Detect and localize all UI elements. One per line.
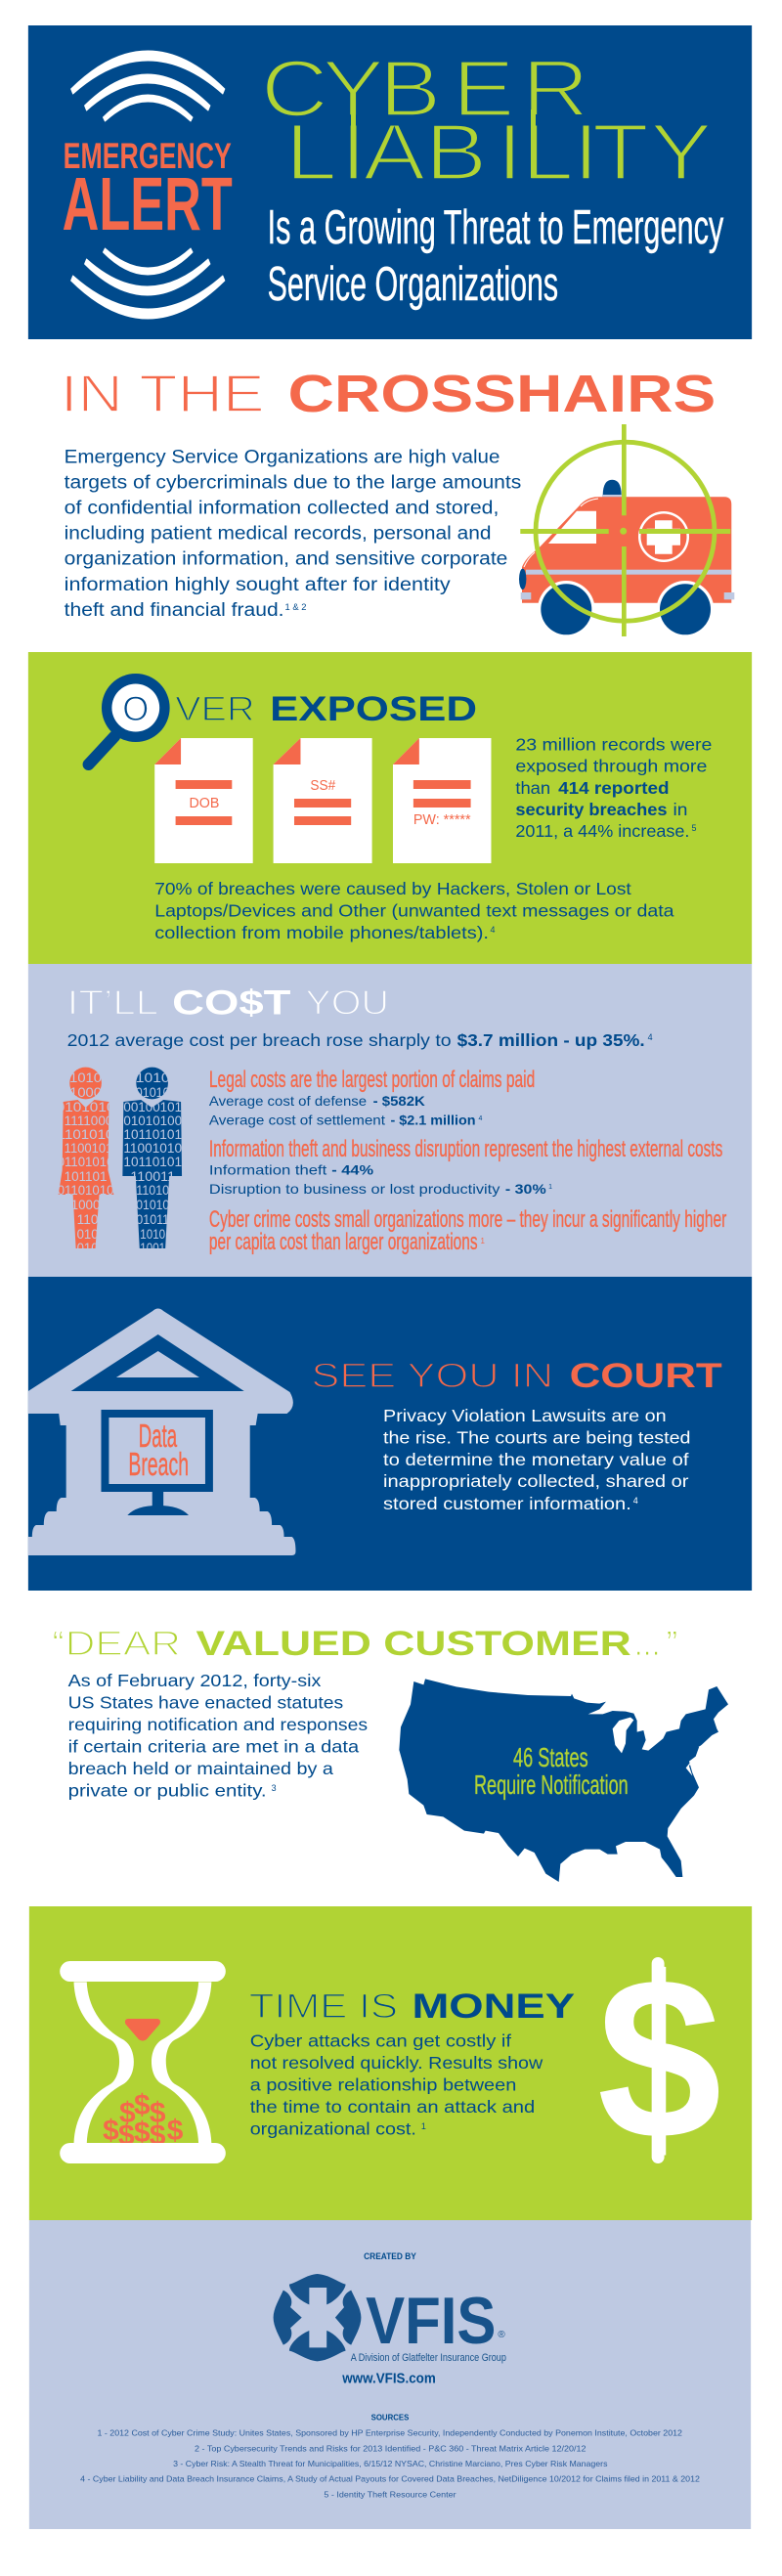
icon: woman figure made of binary: 1100101 (65, 1140, 113, 1156)
text block: 23 million records: 23 million records were (515, 735, 712, 755)
text block: cyber attacks (250, 2031, 543, 2139)
text block: state statutes: breach held or maintained by a (68, 1759, 333, 1778)
text block: information theft (209, 1136, 722, 1197)
text block: crosshairs intro: information highly sought after for identity (65, 574, 451, 595)
heading: time is money: MONEY (412, 1987, 575, 2026)
text block: cyber attacks: organizational cost. (250, 2119, 416, 2139)
panel: see you in court (28, 1277, 752, 1591)
icon: hourglass: $ (150, 2097, 166, 2129)
text block: legal costs: - $2.1 million (390, 1113, 476, 1128)
icon: woman figure made of binary: 0101010 (57, 1099, 115, 1114)
panel: over exposed (28, 652, 752, 964)
text block: 23 million records: in (673, 800, 687, 819)
text block: crosshairs intro: targets of cybercriminals due to the large amounts (65, 471, 522, 493)
text block: 23 million records: 2011, a 44% increase. (515, 821, 689, 841)
sources list: 3 - Cyber Risk: A Stealth Threat for Municipalities, 6/15/12 NYSAC, Christine Marciano, Pres Cyber Risk Managers (173, 2459, 607, 2468)
text block: crosshairs intro: organization information, and sensitive corporate (65, 548, 507, 570)
text block: information theft: 1 (548, 1184, 552, 1191)
emergency alert label (63, 136, 233, 246)
icon: courthouse (28, 1308, 295, 1555)
average cost per breach line: 4 (648, 1032, 653, 1042)
text block: 70 percent of breaches: collection from mobile phones/tablets). (154, 923, 489, 942)
text block: cyber attacks: not resolved quickly. Results show (250, 2053, 543, 2073)
text block: legal costs: Average cost of settlement (209, 1113, 385, 1128)
heading: over exposed: EXPOSED (270, 690, 477, 728)
text block: cyber attacks: the time to contain an attack and (250, 2097, 535, 2117)
text block: privacy lawsuits: stored customer information. (383, 1494, 631, 1513)
icon: man figure made of binary: 01010 (136, 1197, 169, 1212)
text block: privacy lawsuits: Privacy Violation Lawsuits are on (383, 1406, 667, 1425)
icon: woman figure made of binary: 010 (77, 1240, 99, 1255)
logo: VFIS: VFIS (366, 2285, 496, 2358)
text block: crosshairs intro: 1 & 2 (285, 602, 306, 613)
text block: 70 percent of breaches: 70% of breaches were caused by Hackers, Stolen or Lost (154, 879, 631, 898)
icon: woman figure made of binary: 1111000 (65, 1113, 113, 1128)
document: date of birth (154, 738, 253, 863)
average cost per breach line: $3.7 million - up 35%. (457, 1030, 645, 1050)
text block: 70 percent of breaches: Laptops/Devices and Other (unwanted text messages or data (154, 901, 674, 921)
document: social security number: SS# (310, 778, 335, 794)
text block: cyber attacks: a positive relationship between (250, 2075, 516, 2095)
icon: man figure made of binary: 1010 (140, 1226, 165, 1242)
icon: ambulance in crosshairs (519, 424, 734, 638)
panel: time is money (29, 1906, 752, 2220)
panel: dear valued customer (53, 1625, 728, 1882)
icon: woman figure made of binary: 101101 (65, 1168, 108, 1184)
panel: in the crosshairs (61, 365, 734, 638)
icon: man figure made of binary: 00100101 (123, 1099, 182, 1114)
text block: cyber crime costs: 1 (481, 1237, 486, 1245)
heading: dear valued customer: VALUED CUSTOMER (196, 1625, 631, 1663)
logo: VFIS: ® (498, 2330, 505, 2340)
title: cyber liability: LIABILITY (285, 107, 713, 196)
icon: hourglass: $ (119, 2097, 136, 2129)
text block: privacy lawsuits: the rise. The courts are being tested (383, 1428, 690, 1448)
website link: www.VFIS.com (341, 2372, 436, 2387)
icon: hourglass: $ (150, 2119, 166, 2152)
icon: hourglass: $ (103, 2115, 119, 2147)
icon: man figure made of binary: 01010 (136, 1084, 170, 1100)
panel: header (28, 25, 752, 339)
average cost per breach line (67, 1030, 653, 1050)
text block: state statutes: As of February 2012, forty-six (68, 1671, 322, 1690)
heading: over exposed: VER (175, 690, 255, 728)
icon: man figure made of binary: 11010 (136, 1182, 169, 1198)
icon: man figure made of binary: 1010 (136, 1070, 170, 1085)
text block: information theft: Information theft (209, 1163, 327, 1178)
text block: crosshairs intro: Emergency Service Organizations are high value (65, 446, 500, 467)
text block: privacy lawsuits: inappropriately collected, shared or (383, 1471, 689, 1491)
sources list: 4 - Cyber Liability and Data Breach Insurance Claims, A Study of Actual Payouts for Covered Data Breaches, NetDiligence 10/2012 for Claims filed in 2011 & 2012 (80, 2474, 700, 2484)
text block: state statutes: if certain criteria are met in a data (68, 1737, 359, 1757)
sources list: 1 - 2012 Cost of Cyber Crime Study: Unites States, Sponsored by HP Enterprise Security, Independently Conducted by Ponemon Institute, October 2012 (97, 2428, 682, 2438)
sources list: 2 - Top Cybersecurity Trends and Risks for 2013 Identified - P&C 360 - Threat Matrix Article 12/20/12 (195, 2443, 586, 2453)
icon: hourglass: $ (134, 2117, 151, 2149)
title: cyber liability (261, 43, 713, 196)
text block: legal costs: 4 (479, 1115, 483, 1122)
map: united states (399, 1679, 728, 1882)
heading: in the crosshairs: CROSSHAIRS (288, 365, 716, 423)
text block: cyber attacks: Cyber attacks can get costly if (250, 2031, 511, 2051)
heading: see you in court (311, 1357, 722, 1395)
heading: it'll cost you (67, 984, 389, 1023)
text block: crosshairs intro (65, 446, 522, 621)
text block: privacy lawsuits (383, 1406, 690, 1513)
heading: time is money: TIME IS (249, 1987, 398, 2026)
icon: magnifying glass: O (122, 690, 149, 728)
text block: information theft: - 44% (331, 1163, 373, 1178)
text block: state statutes: requiring notification and responses (68, 1715, 368, 1734)
icon: woman figure made of binary: 1000 (71, 1197, 101, 1212)
sources list (80, 2413, 700, 2499)
icon: magnifying glass (89, 674, 170, 764)
document: date of birth: DOB (190, 796, 219, 811)
icon: woman figure made of binary: 010 (77, 1226, 99, 1242)
panel: it'll cost you (28, 964, 752, 1277)
heading: in the crosshairs: IN THE (61, 365, 265, 423)
document: password: PW: ***** (413, 812, 471, 828)
icon: woman figure made of binary: 1010 (69, 1070, 102, 1085)
heading: in the crosshairs (61, 365, 716, 423)
sources list: 5 - Identity Theft Resource Center (324, 2489, 456, 2499)
icon: man figure made of binary: 1001 (140, 1240, 165, 1255)
text block: state statutes (68, 1671, 368, 1801)
text block: privacy lawsuits: to determine the monetary value of (383, 1450, 689, 1469)
heading: time is money (249, 1987, 575, 2026)
text block: information theft: - 30% (505, 1182, 546, 1197)
emergency alert label: ALERT (63, 162, 233, 246)
heading: it'll cost you: YOU (305, 984, 389, 1023)
text block: 23 million records: security breaches (515, 800, 668, 819)
heading: see you in court: SEE YOU IN (311, 1357, 553, 1395)
text block: crosshairs intro: including patient medical records, personal and (65, 523, 491, 545)
sources list: SOURCES (371, 2413, 410, 2423)
icon: woman figure made of binary (57, 1068, 115, 1255)
text block: 70 percent of breaches: 4 (490, 925, 495, 935)
icon: woman figure made of binary: 110 (77, 1211, 99, 1227)
subtitle (268, 201, 724, 311)
icon: woman figure made of binary: 01101010 (58, 1182, 114, 1198)
title: cyber liability: CYBER (261, 43, 589, 133)
icon: man figure made of binary: 10110101 (123, 1126, 182, 1142)
icon: man figure made of binary (122, 1068, 182, 1255)
heading: over exposed (175, 690, 477, 728)
icon: hourglass: $ (118, 2119, 135, 2152)
text block: legal costs: Legal costs are the largest portion of claims paid (209, 1067, 535, 1093)
map: united states: Require Notification (474, 1769, 629, 1800)
icon: hourglass: $ (167, 2115, 184, 2147)
icon: woman figure made of binary: 1101010 (58, 1126, 114, 1142)
map: united states: 46 States (513, 1742, 588, 1772)
text block: state statutes: private or public entity. (68, 1781, 267, 1801)
icon: hourglass (60, 1961, 226, 2163)
icon: man figure made of binary: 01010100 (123, 1113, 182, 1128)
icon: woman figure made of binary: 1000 (69, 1084, 102, 1100)
icon: woman figure made of binary: 01101010 (58, 1154, 114, 1169)
document: password (393, 738, 491, 863)
text block: cyber crime costs (209, 1206, 726, 1255)
icon: man figure made of binary: 10110101 (123, 1154, 182, 1169)
text block: information theft: Disruption to business or lost productivity (209, 1182, 500, 1197)
text block: legal costs (209, 1067, 535, 1128)
text block: crosshairs intro: theft and financial fraud. (65, 599, 284, 621)
text block: state statutes: US States have enacted statutes (68, 1693, 344, 1713)
text block: 23 million records: 5 (691, 823, 696, 833)
icon: large dollar sign: $ (597, 1929, 721, 2187)
text block: 23 million records (515, 735, 712, 841)
text block: state statutes: 3 (272, 1783, 277, 1793)
document: social security number (274, 738, 372, 863)
text block: 23 million records: than (515, 778, 550, 798)
icon: man figure made of binary: 110011 (130, 1168, 175, 1184)
text block: 23 million records: 414 reported (558, 778, 670, 798)
created by label: CREATED BY (364, 2251, 416, 2261)
average cost per breach line: 2012 average cost per breach rose sharply to (67, 1030, 452, 1050)
text block: cyber attacks: 1 (421, 2121, 426, 2131)
heading: dear valued customer: ... (634, 1625, 661, 1663)
heading: it'll cost you: CO$T (172, 984, 291, 1023)
icon: hourglass: $ (134, 2089, 151, 2121)
heading: dear valued customer: DEAR (65, 1625, 181, 1663)
icon: alert signal arcs top (71, 51, 225, 121)
subtitle: Service Organizations (268, 258, 558, 311)
icon: courthouse: Breach (128, 1446, 189, 1482)
logo: VFIS (274, 2274, 506, 2364)
text block: cyber crime costs: per capita cost than larger organizations (209, 1229, 478, 1255)
text block: privacy lawsuits: 4 (633, 1496, 638, 1506)
text block: legal costs: Average cost of defense (209, 1094, 367, 1109)
logo: VFIS: A Division of Glatfelter Insurance Group (351, 2352, 506, 2364)
heading: it'll cost you: IT’LL (67, 984, 158, 1023)
icon: man figure made of binary: 01011 (136, 1211, 169, 1227)
icon: alert signal arcs bottom (71, 248, 225, 319)
icon: man figure made of binary: 11001010 (123, 1140, 182, 1156)
heading: dear valued customer: ” (667, 1625, 677, 1663)
heading: see you in court: COURT (570, 1357, 722, 1395)
emergency alert label: EMERGENCY (64, 136, 232, 176)
text block: crosshairs intro: of confidential information collected and stored, (65, 498, 499, 519)
icon: courthouse: Data (139, 1418, 177, 1454)
panel: credits and sources (29, 2220, 751, 2529)
text block: 70 percent of breaches (154, 879, 674, 942)
text block: legal costs: - $582K (373, 1094, 425, 1109)
heading: dear valued customer (53, 1625, 677, 1663)
text block: 23 million records: exposed through more (515, 757, 707, 776)
heading: dear valued customer: “ (53, 1625, 64, 1663)
